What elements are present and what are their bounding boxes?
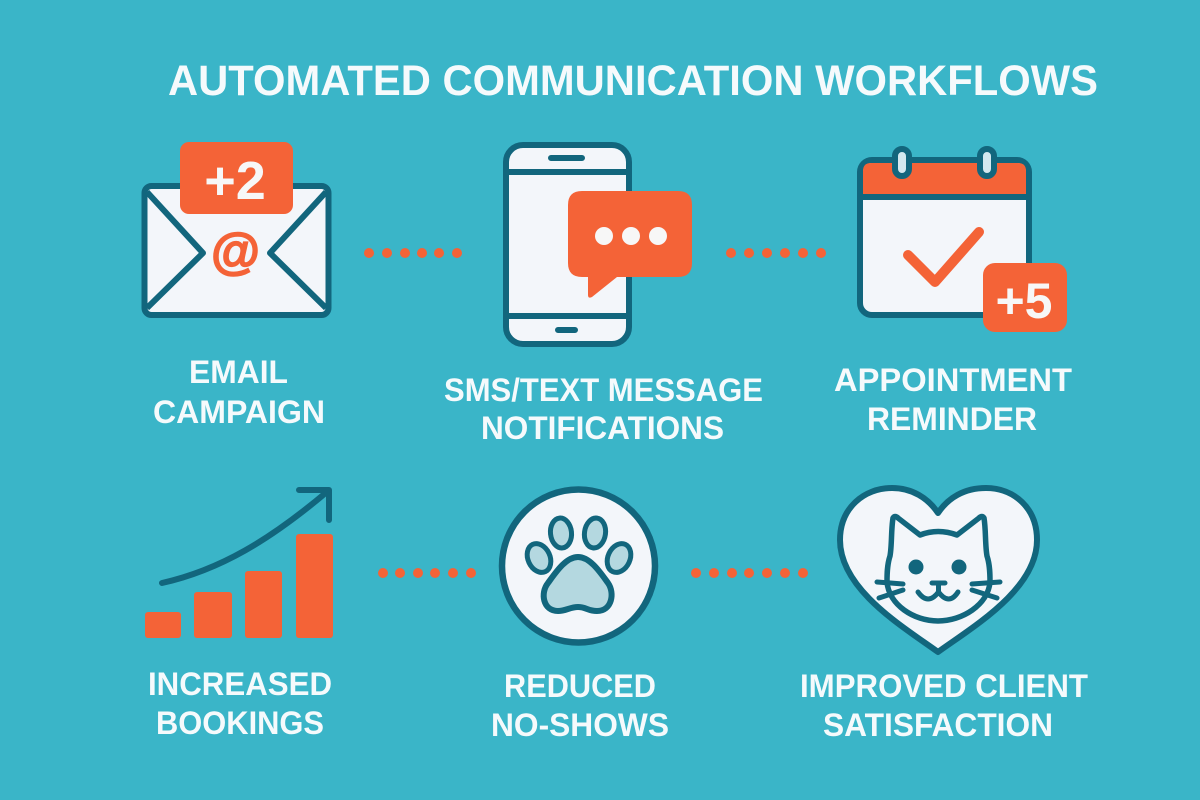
- label: appointment reminder: APPOINTMENT: [834, 362, 1072, 398]
- icon: calendar with check and +5 badge: +5: [995, 273, 1053, 329]
- icon: email envelope with +2 badge: +2: [204, 151, 266, 211]
- title: AUTOMATED COMMUNICATION WORKFLOWS: [168, 57, 1098, 105]
- label: improved client satisfaction: IMPROVED CLIENT: [800, 668, 1088, 704]
- label: increased bookings: [148, 666, 332, 741]
- connector dots: no-shows to satisfaction: [691, 568, 808, 578]
- icon: email envelope with +2 badge: [144, 142, 328, 315]
- label: email campaign: EMAIL: [189, 354, 288, 390]
- icon: calendar with check and +5 badge: [860, 149, 1067, 332]
- label: improved client satisfaction: SATISFACTION: [823, 707, 1053, 743]
- icon: phone with chat bubble: [506, 145, 692, 344]
- label: sms notifications: NOTIFICATIONS: [481, 410, 724, 446]
- label: increased bookings: BOOKINGS: [156, 705, 324, 741]
- label: email campaign: [153, 354, 325, 430]
- label: sms notifications: [444, 372, 763, 446]
- label: appointment reminder: [834, 362, 1072, 437]
- label: email campaign: CAMPAIGN: [153, 394, 325, 430]
- label: appointment reminder: REMINDER: [867, 401, 1037, 437]
- icon: paw in circle: [502, 490, 655, 642]
- label: reduced no-shows: REDUCED: [504, 668, 656, 704]
- connector dots: sms to appointment: [726, 248, 826, 258]
- label: increased bookings: INCREASED: [148, 666, 332, 702]
- connector dots: bookings to no-shows: [378, 568, 476, 578]
- label: reduced no-shows: NO-SHOWS: [491, 707, 669, 743]
- label: sms notifications: SMS/TEXT MESSAGE: [444, 372, 763, 408]
- icon: email envelope with +2 badge: @: [211, 223, 260, 279]
- icon: cat in heart: [840, 488, 1037, 652]
- connector dots: email to sms: [364, 248, 462, 258]
- label: reduced no-shows: [491, 668, 669, 743]
- icon: rising bar chart with arrow: [145, 490, 333, 638]
- label: improved client satisfaction: [800, 668, 1088, 743]
